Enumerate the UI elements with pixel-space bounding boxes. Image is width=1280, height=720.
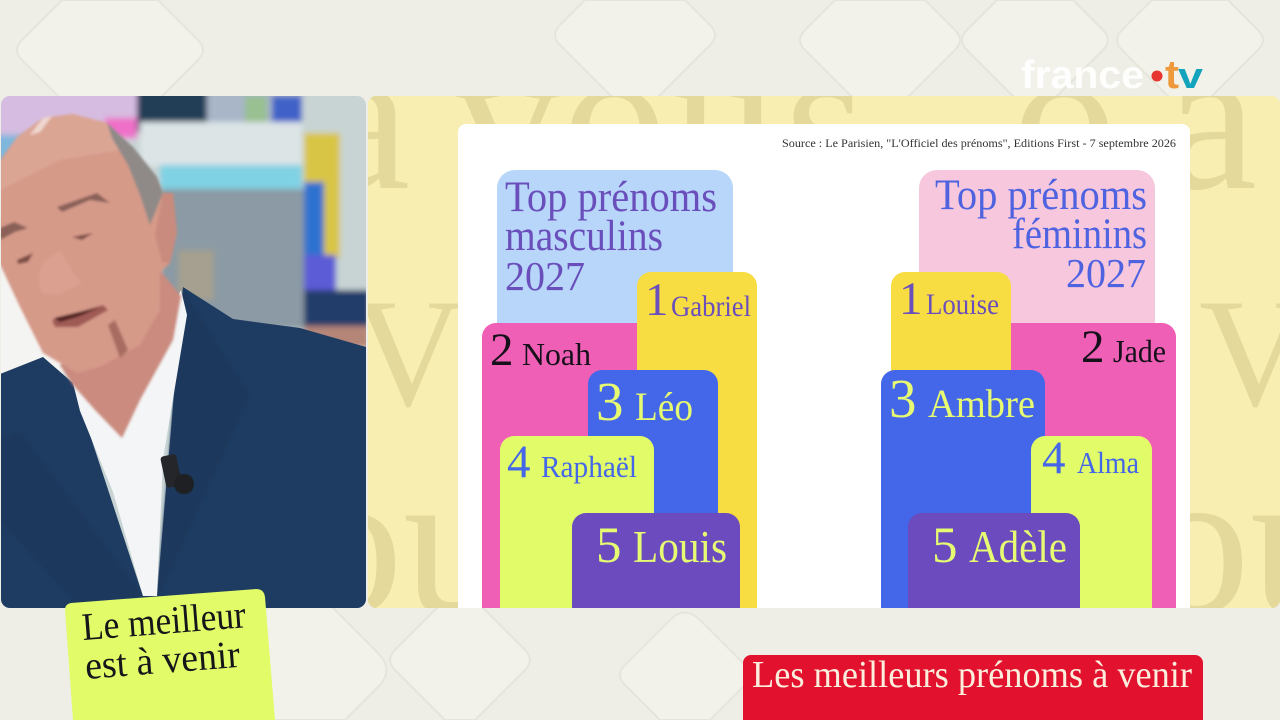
rank 3 Léo: 3 bbox=[596, 371, 624, 432]
rank 4 Raphaël bbox=[500, 436, 654, 608]
rank 5 Louis: Louis bbox=[633, 521, 727, 572]
rank 3 Ambre: 3 bbox=[889, 368, 916, 429]
red banner: Les meilleurs prénoms à venir bbox=[743, 654, 1203, 720]
yellow panel with large watermark letters bbox=[368, 96, 1280, 608]
chart: top male names bbox=[482, 170, 757, 640]
rank 1 Louise bbox=[891, 272, 1011, 371]
yellow panel with large watermark letters: o bbox=[562, 2, 667, 234]
rank 2 Noah: 2 bbox=[490, 324, 514, 376]
rank 1 Louise: Louise bbox=[926, 288, 999, 321]
jacket lapel shading bbox=[142, 290, 183, 596]
shirt bbox=[73, 290, 187, 596]
rank 4 Raphaël: Raphaël bbox=[541, 449, 637, 484]
yellow panel with large watermark letters: o bbox=[1012, 2, 1117, 234]
rank 3 Ambre bbox=[881, 370, 1045, 608]
rank 5 Adèle bbox=[908, 513, 1080, 608]
france.tv logo: v bbox=[1178, 55, 1203, 96]
rank 4 Alma: Alma bbox=[1077, 445, 1139, 480]
yellow panel with large watermark letters: ou bbox=[298, 426, 508, 658]
red banner: Les meilleurs prénoms à venir: Les meilleurs prénoms à venir bbox=[752, 654, 1192, 696]
rank 4 Raphaël: 4 bbox=[507, 436, 530, 488]
rank 3 Ambre: Ambre bbox=[928, 381, 1035, 426]
heading block: feminine: Top prénoms bbox=[935, 172, 1147, 219]
yellow panel with large watermark letters: a bbox=[317, 2, 410, 234]
rank 1 Gabriel: 1 bbox=[645, 274, 668, 326]
rank 2 Jade: 2 bbox=[1081, 321, 1104, 373]
rank 2 Noah: Noah bbox=[522, 336, 591, 372]
rank 5 Adèle: Adèle bbox=[969, 521, 1067, 572]
rank 1 Louise: 1 bbox=[899, 273, 922, 325]
rank 1 Gabriel: Gabriel bbox=[671, 290, 751, 323]
yellow panel with large watermark letters: a bbox=[1164, 2, 1257, 234]
yellow panel with large watermark letters: s bbox=[785, 2, 867, 234]
rank 3 Léo bbox=[588, 370, 718, 513]
rank 5 Louis: 5 bbox=[596, 518, 622, 574]
rank 4 Alma: 4 bbox=[1042, 432, 1066, 484]
rank 2 Jade: Jade bbox=[1113, 333, 1166, 369]
france.tv logo bbox=[1021, 53, 1203, 97]
rank 2 Jade bbox=[1011, 323, 1176, 608]
heading block: feminine: 2027 bbox=[1066, 250, 1146, 296]
rank 1 Gabriel bbox=[637, 272, 757, 640]
rank 4 Alma bbox=[1031, 436, 1152, 608]
lime caption tag: Le meilleur est à venir bbox=[65, 589, 275, 720]
head bbox=[0, 114, 177, 373]
rank 5 Adèle: 5 bbox=[932, 518, 958, 574]
heading block: masculine: 2027 bbox=[505, 253, 585, 299]
jacket bbox=[0, 287, 370, 615]
rank 3 Léo: Léo bbox=[635, 384, 693, 429]
yellow panel with large watermark letters: v bbox=[455, 2, 560, 234]
neck bbox=[60, 270, 181, 438]
yellow panel with large watermark letters: V bbox=[352, 267, 464, 439]
france.tv logo: france bbox=[1021, 54, 1144, 97]
heading block: feminine: féminins bbox=[1012, 211, 1147, 258]
heading block: masculine: masculins bbox=[505, 213, 663, 260]
chart: top female names bbox=[881, 170, 1176, 640]
france.tv logo: t bbox=[1165, 53, 1179, 97]
lapel microphone bbox=[160, 454, 194, 494]
presenter video frame bbox=[0, 90, 375, 615]
heading block: masculine bbox=[497, 170, 733, 323]
source line: Source : Le Parisien, "L'Officiel des prénoms", Editions First - 7 septembre 2026 bbox=[782, 136, 1176, 150]
lime caption tag: Le meilleur est à venir: est à venir bbox=[83, 633, 241, 688]
blurred studio backdrop bbox=[0, 90, 375, 615]
heading block: feminine bbox=[919, 170, 1155, 323]
rank 2 Noah bbox=[482, 323, 637, 608]
lime caption tag: Le meilleur est à venir: Le meilleur bbox=[80, 593, 247, 649]
yellow panel with large watermark letters: u bbox=[672, 2, 777, 234]
heading block: masculine: Top prénoms bbox=[505, 174, 717, 221]
rank 5 Louis bbox=[572, 513, 740, 608]
